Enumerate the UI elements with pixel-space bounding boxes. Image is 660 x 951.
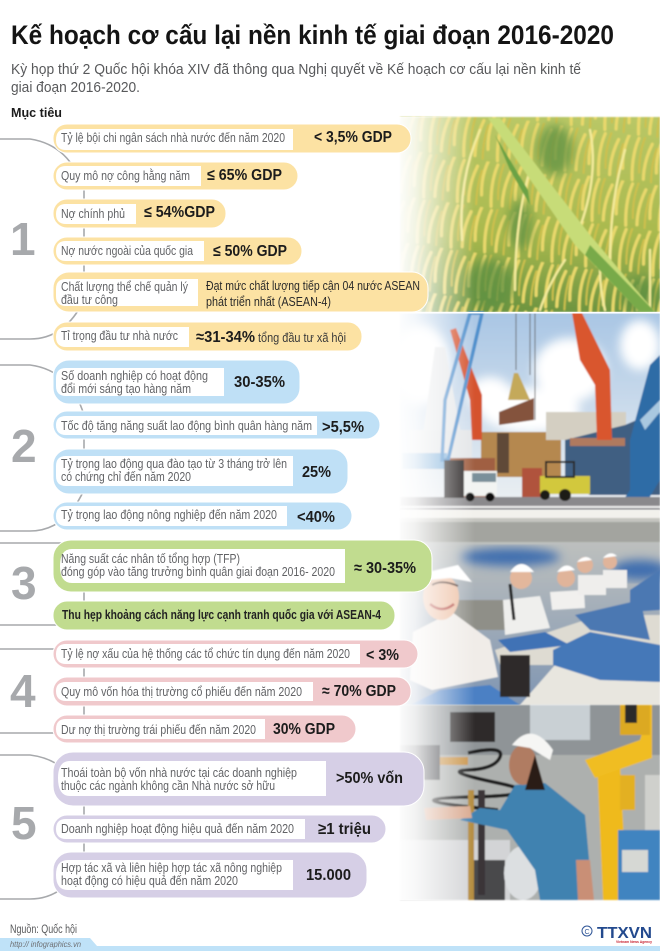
row 6: ≈31-34% xyxy=(196,329,255,346)
dark machine zone xyxy=(450,600,510,630)
row 2 xyxy=(53,162,298,190)
intro text xyxy=(11,61,582,96)
blue crane xyxy=(442,313,482,460)
row 1: < 3,5% GDP xyxy=(314,129,392,146)
row 7: đổi mới sáng tạo hàng năm xyxy=(61,382,191,396)
row 18 xyxy=(53,852,367,898)
photo left fade xyxy=(395,117,475,900)
row 14 xyxy=(53,677,411,706)
row 15: Dư nợ thị trường trái phiếu đến năm 2020 xyxy=(61,723,256,737)
row 5: phát triển nhất (ASEAN-4) xyxy=(206,294,331,309)
group bracket lines xyxy=(0,139,84,899)
seated women xyxy=(503,564,550,635)
row 12: Thu hẹp khoảng cách năng lực cạnh tranh quốc gia với ASEAN-4 xyxy=(62,608,381,622)
photo: garment factory xyxy=(400,510,660,705)
ship hull xyxy=(565,410,660,495)
coil spring xyxy=(434,750,521,810)
row 11: đóng góp vào tăng trưởng bình quân giai đoạn 2016- 2020 xyxy=(61,565,335,579)
row 15: 30% GDP xyxy=(273,721,335,738)
logo: TTXVN: C xyxy=(584,929,590,936)
row 5: Đạt mức chất lượng tiếp cận 04 nước ASEAN xyxy=(206,278,420,293)
website url: http:// infographics.vn xyxy=(10,939,81,949)
red cranes xyxy=(572,313,612,440)
row 6 xyxy=(53,322,362,351)
row 14: ≈ 70% GDP xyxy=(322,683,396,700)
row 8 xyxy=(53,411,380,439)
row 3: ≤ 54%GDP xyxy=(144,204,215,221)
ground xyxy=(400,497,660,510)
logo: TTXVN xyxy=(582,925,653,944)
row 6: tổng đầu tư xã hội xyxy=(258,331,346,345)
row 8: Tốc độ tăng năng suất lao động bình quân hàng năm xyxy=(61,419,312,433)
row 16 xyxy=(53,752,424,806)
row 3: Nợ chính phủ xyxy=(61,207,125,221)
row 9: Tỷ trọng lao động qua đào tạo từ 3 tháng trở lên xyxy=(61,457,287,471)
row 7 xyxy=(53,360,300,404)
brake disc xyxy=(504,846,542,900)
row 1 xyxy=(53,124,411,153)
row 7: Số doanh nghiệp có hoạt động xyxy=(61,369,208,383)
row 17 xyxy=(53,815,386,843)
row 5: Chất lượng thể chế quản lý xyxy=(61,280,189,294)
blue fabric xyxy=(498,632,570,652)
row 10: <40% xyxy=(297,509,335,526)
group number 3: 3 xyxy=(11,557,37,609)
row 9: có chứng chỉ đến năm 2020 xyxy=(61,470,191,484)
row 17: ≥1 triệu xyxy=(318,821,371,838)
group number 2: 2 xyxy=(11,420,37,472)
row 11 xyxy=(53,540,432,592)
row 18: Hợp tác xã và liên hiệp hợp tác xã nông nghiệp xyxy=(61,861,282,875)
row 12 xyxy=(53,601,395,630)
row 1: Tỷ lệ bội chi ngân sách nhà nước đến năm 2020 xyxy=(61,131,285,145)
dark table shadow xyxy=(500,655,530,697)
intro text: giai đoạn 2016-2020. xyxy=(11,79,140,96)
source: Nguồn: Quốc hội xyxy=(10,924,77,936)
row 8: >5,5% xyxy=(322,419,364,436)
row 5 xyxy=(53,272,428,312)
row 13 xyxy=(53,640,418,668)
hanging container xyxy=(499,313,535,425)
row 3 xyxy=(53,199,226,228)
logo: TTXVN: TTXVN xyxy=(597,925,652,942)
row 16: >50% vốn xyxy=(336,770,403,787)
row 9 xyxy=(53,449,348,494)
row 7: 30-35% xyxy=(234,374,285,391)
photo: port xyxy=(390,313,660,510)
row 16: thuộc các ngành không cần Nhà nước sở hữu xyxy=(61,779,275,793)
building tower xyxy=(420,347,462,455)
row 13: < 3% xyxy=(366,647,399,664)
subheading: Mục tiêu xyxy=(11,105,62,120)
row 16: Thoái toàn bộ vốn nhà nước tại các doanh nghiệp xyxy=(61,766,297,780)
blue cabinet xyxy=(618,830,660,900)
photo: mechanic xyxy=(400,705,660,900)
footer strip xyxy=(0,938,660,951)
rice leaf xyxy=(488,118,655,312)
forklift xyxy=(540,462,590,501)
row 17: Doanh nghiệp hoạt động hiệu quả đến năm 2020 xyxy=(61,822,294,836)
row 14: Quy mô vốn hóa thị trường cổ phiếu đến năm 2020 xyxy=(61,685,302,699)
row 15 xyxy=(53,715,356,743)
row 10: Tỷ trọng lao động nông nghiệp đến năm 2020 xyxy=(61,508,277,522)
group number 5: 5 xyxy=(11,797,37,849)
row 18: 15.000 xyxy=(306,867,351,884)
row 2: ≤ 65% GDP xyxy=(207,167,282,184)
warehouse stacks xyxy=(481,432,561,477)
row 18: hoạt động có hiệu quả đến năm 2020 xyxy=(61,874,238,888)
row 6: Tỉ trọng đầu tư nhà nước xyxy=(61,329,178,343)
front woman xyxy=(410,565,498,690)
row 4 xyxy=(53,237,302,265)
intro text: Kỳ họp thứ 2 Quốc hội khóa XIV đã thông qua Nghị quyết về Kế hoạch cơ cấu lại nền kinh tế xyxy=(11,61,582,78)
row 13: Tỷ lệ nợ xấu của hệ thống các tổ chức tín dụng đến năm 2020 xyxy=(61,647,350,661)
group number 1: 1 xyxy=(10,213,36,265)
photo: rice field xyxy=(400,117,660,313)
truck xyxy=(444,460,497,502)
row 10 xyxy=(53,502,352,530)
title: Kế hoạch cơ cấu lại nền kinh tế giai đoạn 2016-2020 xyxy=(11,20,614,50)
row 11: Năng suất các nhân tố tổng hợp (TFP) xyxy=(61,552,240,566)
table surfaces xyxy=(520,665,660,705)
logo: TTXVN: Vietnam News Agency xyxy=(616,939,653,944)
row 9: 25% xyxy=(302,464,331,481)
mechanic xyxy=(424,734,594,900)
yellow post xyxy=(597,762,627,900)
row 11: ≈ 30-35% xyxy=(354,560,416,577)
row 4: Nợ nước ngoài của quốc gia xyxy=(61,244,193,258)
row 2: Quy mô nợ công hằng năm xyxy=(61,168,190,183)
row 4: ≤ 50% GDP xyxy=(213,243,287,260)
row 5: đầu tư công xyxy=(61,293,118,307)
group number 4: 4 xyxy=(10,665,36,717)
